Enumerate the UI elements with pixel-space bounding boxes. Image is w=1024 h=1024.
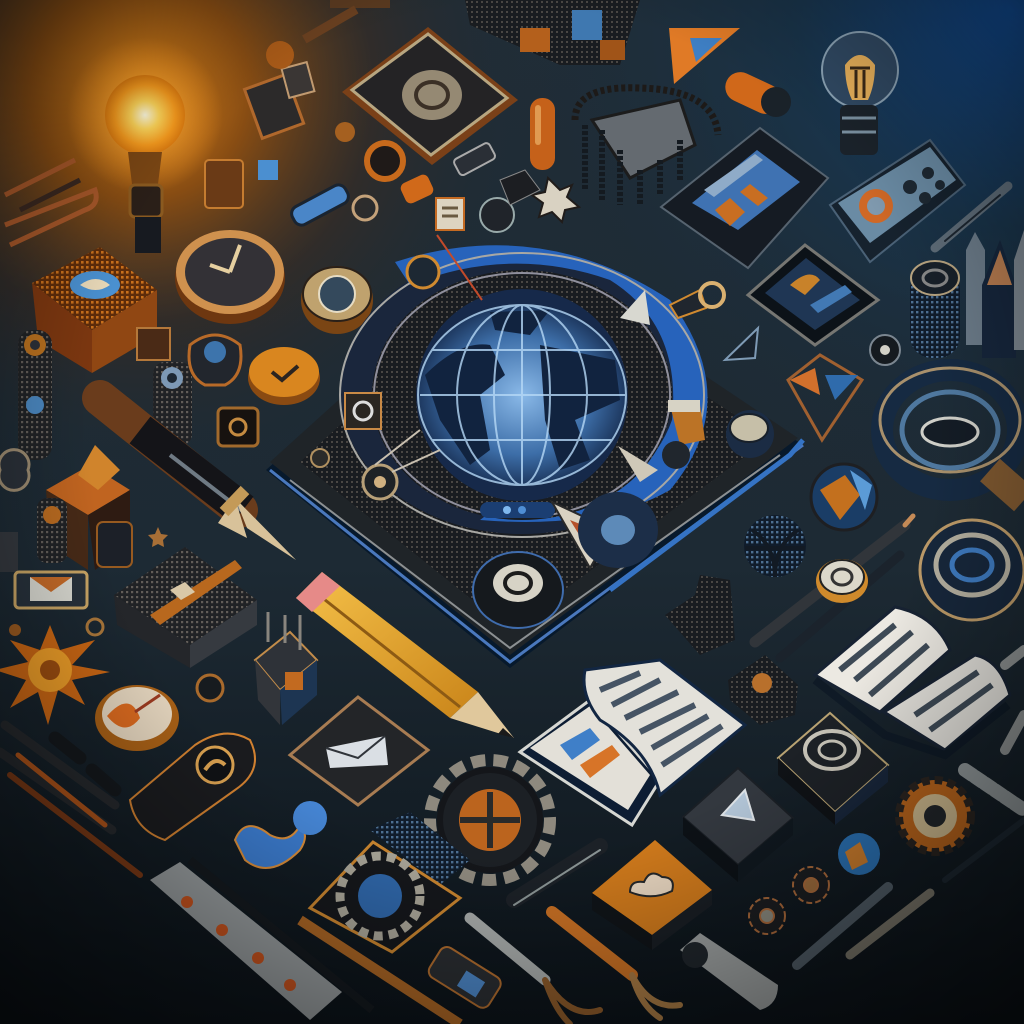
icon: wrench (680, 933, 778, 1010)
icon: clips top left (5, 160, 96, 245)
icon: tablet with bar chart (661, 128, 828, 268)
icon: envelope tile (290, 697, 428, 805)
icon: blue curl clip (130, 734, 255, 840)
icon: card with orange sketch (748, 245, 878, 345)
icon: stacked packets (114, 547, 257, 668)
icon: orange triangle (669, 28, 740, 84)
icon: scissors (470, 846, 680, 1024)
icon: central platform (266, 245, 803, 668)
icon: dark tower blocks (665, 575, 798, 725)
icon: capsule (720, 67, 791, 119)
icon: arrow badge (552, 492, 658, 568)
icon: small pen right top (935, 186, 1008, 248)
icon: gear tile (310, 842, 460, 952)
icon: blue outlined bulb (822, 32, 898, 155)
icon: book left (520, 660, 745, 825)
icon: envelope badge left (15, 572, 87, 608)
icon: spiral badge (473, 552, 563, 628)
icon: globe (416, 289, 628, 501)
icon: lantern box (255, 612, 317, 725)
icon: play tile (683, 768, 793, 882)
icon: blue shape (235, 801, 327, 868)
icon: sun (0, 619, 110, 725)
icon: orange pill (530, 98, 555, 170)
icon: coil stack (910, 261, 960, 358)
icon: bronze gear (899, 780, 971, 852)
icon: ring around globe (340, 245, 708, 537)
icon: left column devices (18, 328, 258, 460)
icon: pen (100, 398, 296, 560)
icon: bottom ruler (150, 860, 460, 1024)
icon: remote control (830, 140, 965, 262)
icon: left orange boxes (0, 445, 168, 572)
icon: small marker bottom (426, 944, 504, 1011)
icon: orange cloud tile (592, 840, 712, 950)
icon: tablet with wires (575, 88, 718, 205)
icon: blocks top center (465, 0, 640, 65)
icon: clock (175, 230, 285, 324)
icon: orange check badge (248, 347, 320, 405)
icon: small gears (749, 867, 829, 934)
icon: small orange kite (725, 328, 900, 440)
icon: glowing light bulb (67, 37, 223, 253)
icon: small tools column top (205, 0, 496, 228)
icon: satellite markers (311, 170, 774, 499)
icon: pencils right (966, 230, 1024, 358)
icon: bottom right pens (797, 650, 1024, 965)
icon: magnifier (880, 368, 1024, 500)
icon: left cube (32, 247, 157, 373)
icon: framed picture top (342, 27, 518, 165)
icon: small globe (811, 464, 877, 530)
icon: spiral block right (920, 520, 1024, 620)
icon: book right (815, 607, 1010, 755)
icon: globe badge (301, 266, 373, 334)
icon: gear with dark scaffold (370, 760, 550, 885)
icon: pencil (296, 572, 514, 738)
icon: left stripes bottom (0, 725, 140, 875)
icon: mini globe bottom right (838, 833, 880, 875)
icon: spiral tile (778, 713, 888, 825)
icon: striped ball (744, 515, 806, 577)
icon: orange dial (95, 675, 223, 751)
icon: compass pen (755, 516, 913, 658)
